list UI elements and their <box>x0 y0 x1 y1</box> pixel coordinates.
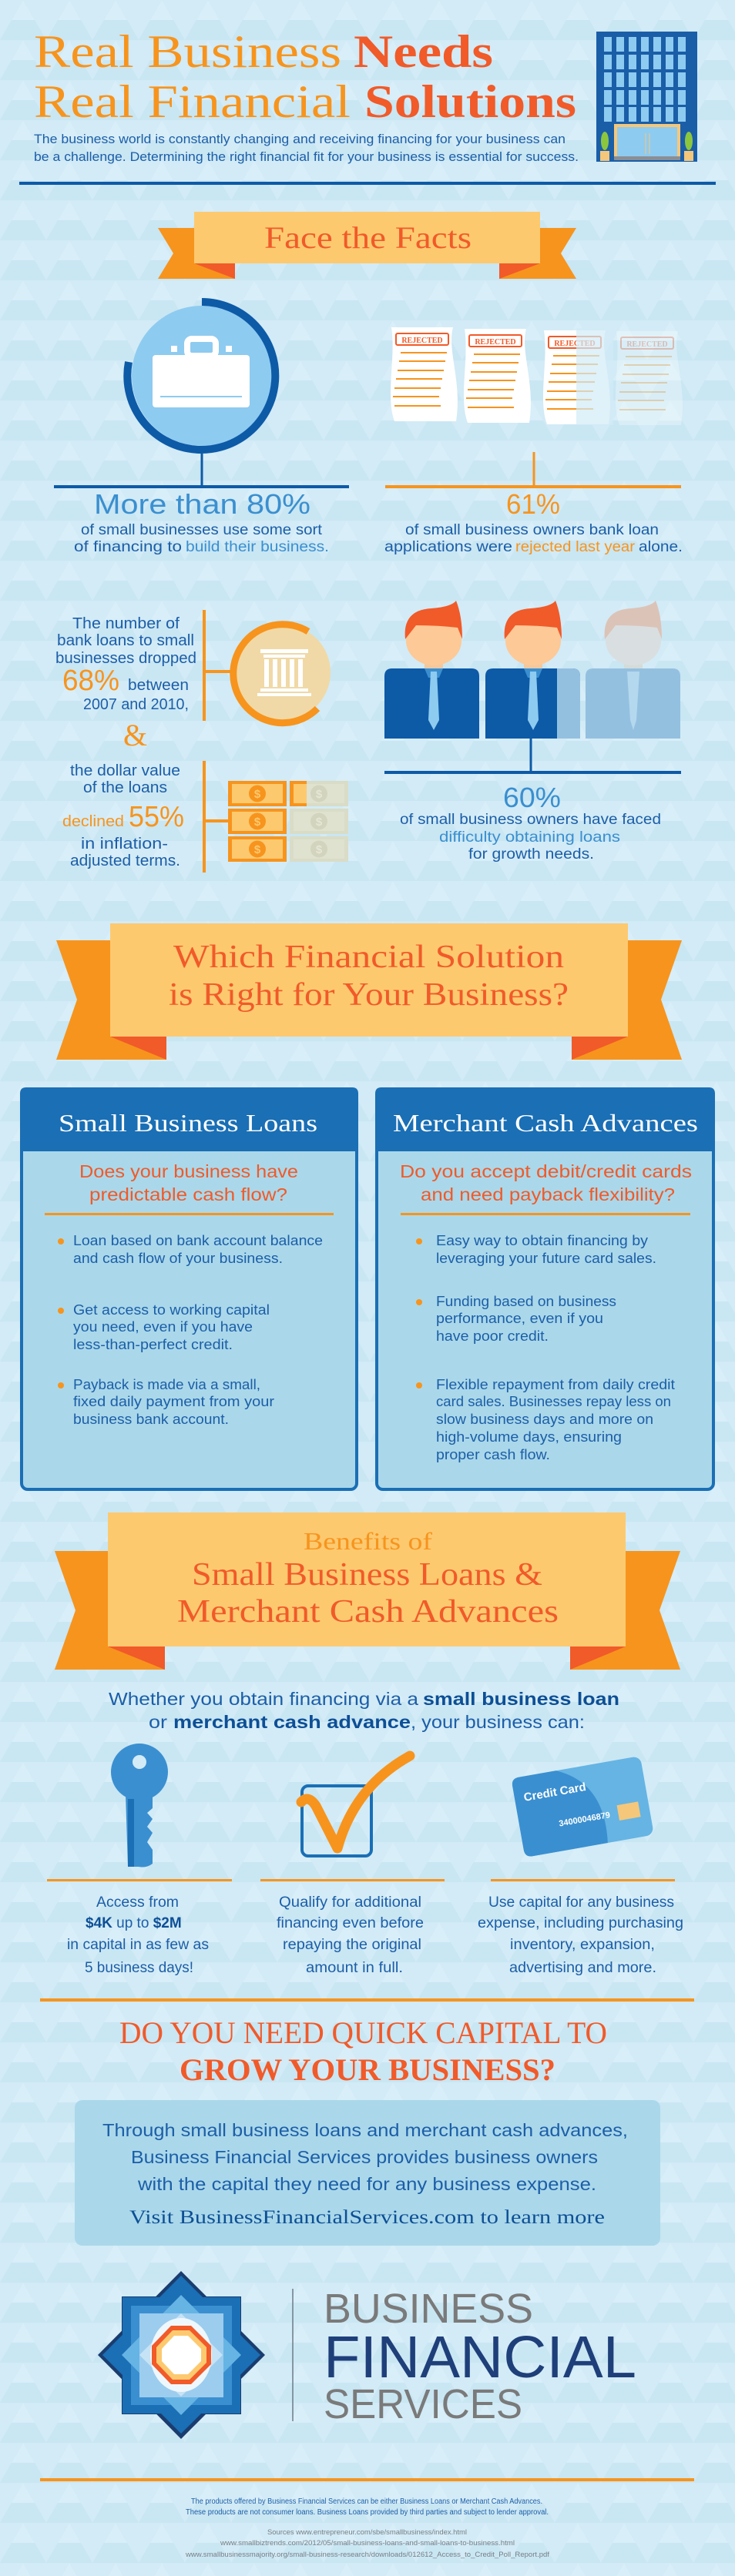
benefit: qualify <box>277 1894 424 1976</box>
icon: logo mark <box>98 2271 265 2439</box>
stat: 60%: difficulty obtaining loans <box>439 829 620 846</box>
heading: Do you need quick capital: GROW YOUR BUSINESS? <box>180 2052 555 2087</box>
benefit: access capital: $4K up to $2M <box>86 1915 182 1931</box>
bullet list: Flexible repayment from daily credit <box>436 1377 675 1392</box>
bullet list: performance, even if you <box>436 1311 603 1326</box>
title: Real Financial <box>34 76 351 127</box>
stat: 68% bank loans dropped: businesses dropped <box>55 650 196 667</box>
benefit: use capital: Use capital for any business <box>488 1894 674 1911</box>
title: Needs <box>354 26 493 77</box>
intro text: merchant cash advance <box>173 1712 411 1732</box>
icon: bank coin <box>204 610 331 723</box>
panel: Small Business Loans <box>20 1087 358 1489</box>
bullet list: and cash flow of your business. <box>73 1251 283 1266</box>
intro text: or <box>149 1712 167 1732</box>
logo: Business Financial Services <box>98 2271 636 2439</box>
bullet list <box>416 1233 675 1462</box>
stat: 80%: More than 80% <box>94 488 310 520</box>
panel title: Small Business Loans <box>59 1109 317 1137</box>
icon: money bills <box>204 761 348 873</box>
icon: checkbox <box>301 1756 410 1856</box>
stat: 61%: alone. <box>639 539 683 555</box>
callout box: Visit BusinessFinancialServices.com to learn more <box>129 2207 605 2228</box>
bullet list: Funding based on business <box>436 1294 616 1309</box>
panel title: Merchant Cash Advances <box>393 1109 698 1137</box>
title <box>34 26 576 127</box>
stat: 68% bank loans dropped: 68% <box>62 665 119 697</box>
benefit columns <box>47 1879 683 1976</box>
question <box>400 1161 692 1215</box>
stat: 55% dollar value: the dollar value <box>70 762 180 779</box>
question: Do you accept debit/credit cards <box>400 1161 692 1181</box>
benefit: qualify: financing even before <box>277 1915 424 1931</box>
benefit: qualify: Qualify for additional <box>279 1894 421 1911</box>
benefit: use capital: advertising and more. <box>509 1960 656 1976</box>
subtitle: be a challenge. Determining the right financial fit for your business is essential for success. <box>34 149 579 164</box>
heading: Benefits: Benefits of <box>304 1527 432 1555</box>
heading: Do you need quick capital: DO YOU NEED QUICK CAPITAL TO <box>119 2015 607 2050</box>
heading: Benefits: Merchant Cash Advances <box>177 1594 559 1630</box>
subtitle <box>34 132 579 164</box>
stat: 80%: of small businesses use some sort <box>81 522 323 538</box>
stat: 68% bank loans dropped: 2007 and 2010, <box>83 696 189 713</box>
benefit: qualify: repaying the original <box>283 1937 421 1953</box>
stat: 60%: 60% <box>503 782 561 813</box>
disclaimer: The products offered by Business Financial Services can be either Business Loans or Merchant Cash Advances. <box>191 2497 542 2506</box>
question: Does your business have <box>79 1161 298 1181</box>
callout box: Through small business loans and merchant cash advances, <box>102 2120 628 2140</box>
bullet list: have poor credit. <box>436 1328 549 1344</box>
stat: 61%: of small business owners bank loan <box>405 522 659 538</box>
stat: 61% <box>384 488 683 555</box>
heading: Benefits: Small Business Loans & <box>192 1557 542 1593</box>
bullet list: business bank account. <box>73 1412 229 1427</box>
bullet list <box>58 1233 323 1427</box>
benefit: access capital: Access from <box>96 1894 179 1911</box>
benefit: qualify: amount in full. <box>306 1960 403 1976</box>
heading: Do you need quick capital <box>119 2015 607 2087</box>
bullet list: Get access to working capital <box>73 1302 270 1318</box>
stat: 60%: for growth needs. <box>468 846 594 863</box>
stat: 55% dollar value: 55% <box>129 801 184 833</box>
heading: Face the Facts: Face the Facts <box>264 220 472 255</box>
benefit: access capital: 5 business days! <box>85 1960 193 1976</box>
benefit: use capital: inventory, expansion, <box>510 1937 655 1953</box>
stat: 60% <box>400 782 661 863</box>
sources: www.smallbusinessmajority.org/small-business-research/downloads/012612_Access_to_Credit_Poll_Report.pdf <box>185 2551 549 2559</box>
bullet list: high-volume days, ensuring <box>436 1429 622 1445</box>
stat: 68% bank loans dropped: The number of <box>72 615 180 632</box>
logo text: BUSINESS <box>324 2286 533 2332</box>
intro text: , your business can: <box>411 1712 585 1732</box>
bullet list: slow business days and more on <box>436 1412 653 1427</box>
bullet list: Payback is made via a small, <box>73 1377 260 1392</box>
ampersand: & <box>123 718 147 752</box>
bullet list: leveraging your future card sales. <box>436 1251 656 1266</box>
benefit: access capital <box>67 1894 209 1976</box>
icon: credit card <box>511 1756 654 1857</box>
icon: credit card: 34000046879 <box>559 1811 611 1829</box>
disclaimer <box>186 2497 549 2517</box>
bullet list: Loan based on bank account balance <box>73 1233 323 1248</box>
callout box: with the capital they need for any business expense. <box>137 2174 596 2194</box>
heading: Which Financial Solution: is Right for Your Business? <box>169 977 569 1013</box>
logo text: SERVICES <box>324 2381 522 2427</box>
icon: credit card: Credit Card <box>523 1780 587 1804</box>
question: predictable cash flow? <box>89 1184 287 1204</box>
stat: 55% dollar value: in inflation- <box>81 836 168 853</box>
benefit: use capital: expense, including purchasing <box>478 1915 683 1931</box>
benefit: access capital: in capital in as few as <box>67 1937 209 1953</box>
title: Solutions <box>364 76 576 127</box>
stat: 68% bank loans dropped <box>55 615 196 713</box>
stat: 55% dollar value: of the loans <box>83 779 167 796</box>
sources: Sources www.entrepreneur.com/sbe/smallbusiness/index.html <box>267 2528 467 2537</box>
stat: 55% dollar value <box>62 762 184 869</box>
stat: 80%: build their business. <box>186 539 329 555</box>
bullet list: card sales. Businesses repay less on <box>436 1394 671 1409</box>
heading: Benefits <box>177 1527 559 1630</box>
icon: rejected papers <box>385 327 683 488</box>
icon: key <box>111 1744 168 1867</box>
stat: 55% dollar value: adjusted terms. <box>70 853 180 869</box>
icon: three business people <box>384 601 681 774</box>
icon: briefcase circle <box>54 302 349 488</box>
stat: 61%: 61% <box>506 488 560 520</box>
disclaimer: These products are not consumer loans. Business Loans provided by third parties and subject to lender approval. <box>186 2508 549 2517</box>
question <box>45 1161 334 1215</box>
stat: 68% bank loans dropped: bank loans to small <box>57 632 194 649</box>
sources: www.smallbiztrends.com/2012/05/small-business-loans-and-small-loans-to-business.html <box>220 2539 515 2548</box>
stat: 61%: rejected last year <box>515 539 636 555</box>
stat: 68% bank loans dropped: between <box>128 677 189 694</box>
heading: Which Financial Solution: Which Financial Solution <box>173 940 564 975</box>
ribbon: Which Financial Solution <box>56 923 682 1060</box>
stat: 61%: applications were <box>384 539 512 555</box>
stat: 55% dollar value: declined <box>62 813 124 830</box>
stat: 80%: of financing to <box>74 539 182 555</box>
callout box: Business Financial Services provides business owners <box>131 2147 598 2167</box>
ribbon: Benefits <box>55 1512 680 1670</box>
subtitle: The business world is constantly changing and receiving financing for your business can <box>34 132 566 146</box>
icon: office building <box>596 32 697 162</box>
heading: Which Financial Solution <box>169 940 569 1013</box>
bullet list: fixed daily payment from your <box>73 1394 274 1409</box>
stat: 60%: of small business owners have faced <box>400 812 661 828</box>
intro text: small business loan <box>423 1689 619 1709</box>
bullet list: less-than-perfect credit. <box>73 1337 233 1352</box>
callout box <box>75 2100 660 2246</box>
stat: 80% <box>74 488 329 555</box>
logo text: FINANCIAL <box>324 2324 636 2390</box>
title: Real Business <box>34 26 341 77</box>
logo text <box>324 2286 636 2427</box>
bullet list: proper cash flow. <box>436 1447 550 1462</box>
bullet list: you need, even if you have <box>73 1319 253 1335</box>
sources <box>185 2528 549 2559</box>
benefit: use capital <box>478 1894 683 1976</box>
question: and need payback flexibility? <box>421 1184 675 1204</box>
bullet list: Easy way to obtain financing by <box>436 1233 648 1248</box>
ribbon: Face the Facts <box>158 212 576 279</box>
panel: Merchant Cash Advances <box>375 1087 715 1489</box>
intro text <box>109 1689 619 1732</box>
intro text: Whether you obtain financing via a <box>109 1689 418 1709</box>
